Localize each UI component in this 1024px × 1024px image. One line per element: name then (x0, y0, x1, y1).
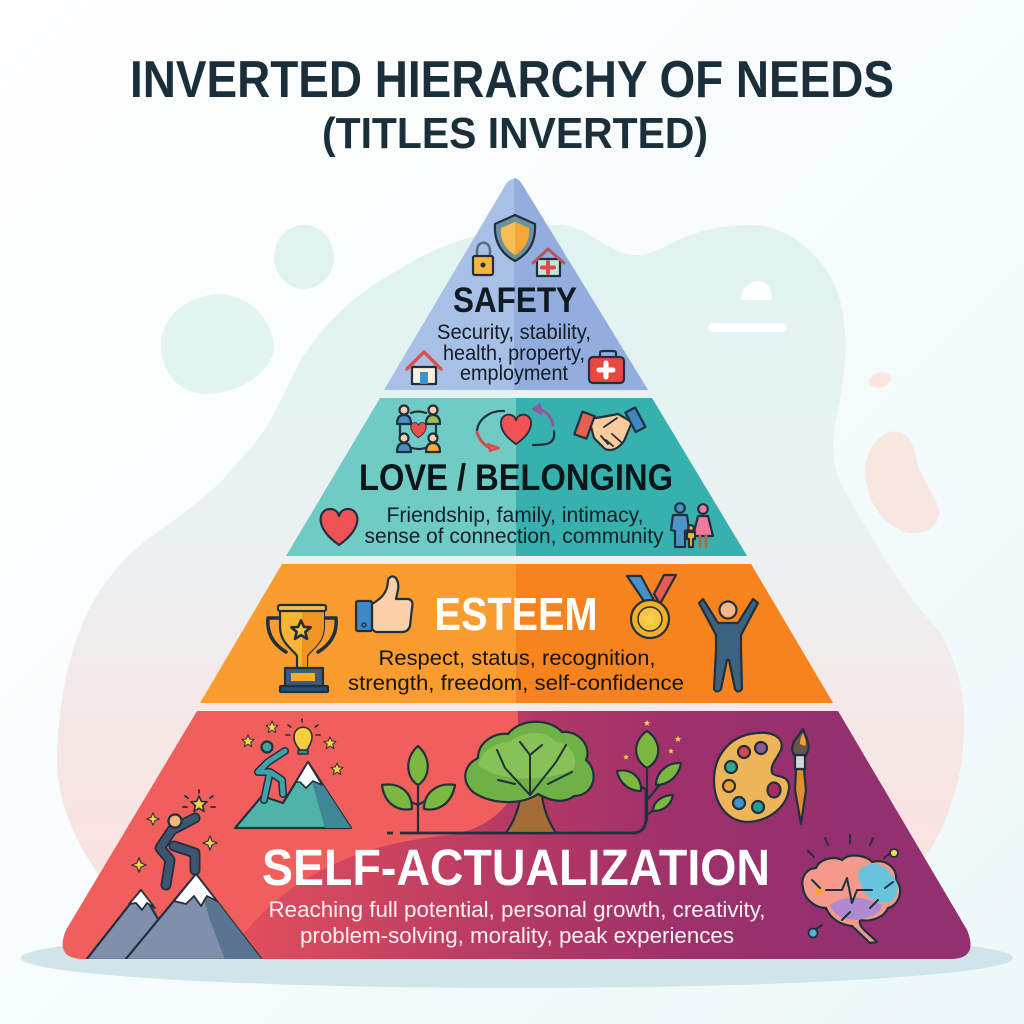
icon: summit climber with stars (86, 790, 262, 960)
ground shadow (21, 928, 1013, 988)
icon: home (407, 352, 441, 384)
icon: tree (465, 722, 594, 833)
description: safety (437, 321, 591, 385)
icon: first aid kit (589, 351, 624, 383)
description: self-actualization: Reaching full potential, personal growth, creativity, (268, 897, 766, 922)
icon: sprout (382, 746, 455, 833)
icon: paint brush (792, 729, 809, 824)
subtitle: (TITLES INVERTED) (322, 109, 708, 158)
description: safety: employment (460, 362, 568, 385)
icon: family (671, 503, 713, 547)
icon: small mountains (86, 874, 262, 960)
description: esteem: strength, freedom, self-confidence (348, 671, 684, 695)
icon: painter palette (714, 733, 789, 822)
tier: safety (384, 178, 648, 390)
description: esteem (348, 646, 684, 695)
icon: heart cycle (477, 404, 554, 451)
description: love and belonging (364, 504, 664, 548)
background blobs (57, 225, 964, 950)
icon: shield (495, 215, 535, 261)
icon: padlock (473, 243, 493, 275)
tier: love and belonging (286, 398, 747, 556)
heading: esteem: ESTEEM (434, 588, 598, 640)
icon: handshake (574, 407, 645, 450)
icon: connected people (397, 406, 440, 452)
description: self-actualization (268, 897, 766, 948)
tier: self-actualization (63, 711, 980, 960)
description: love and belonging: sense of connection, community (364, 525, 664, 548)
icon: thumbs up (356, 576, 412, 632)
heading: safety: SAFETY (453, 281, 577, 320)
description: love and belonging: Friendship, family, intimacy, (386, 504, 644, 527)
tier: esteem (200, 564, 833, 703)
description: self-actualization: problem-solving, morality, peak experiences (300, 923, 734, 948)
icon: trophy (268, 605, 336, 692)
icon: medal (627, 575, 676, 638)
description: safety: Security, stability, (437, 321, 591, 344)
heading: self-actualization: SELF-ACTUALIZATION (262, 839, 770, 896)
title: INVERTED HIERARCHY OF NEEDS (130, 51, 894, 109)
icon: mountain climber with idea (235, 719, 351, 828)
icon: growing plant (617, 720, 681, 820)
icon: heart (321, 509, 357, 545)
description: esteem: Respect, status, recognition, (378, 646, 656, 670)
icon: health house (533, 249, 564, 276)
heading: love and belonging: LOVE / BELONGING (359, 457, 673, 498)
icon: brain (802, 835, 900, 943)
ground line (387, 790, 646, 833)
description: safety: health, property, (443, 342, 585, 365)
icon: celebrating person (699, 599, 758, 692)
